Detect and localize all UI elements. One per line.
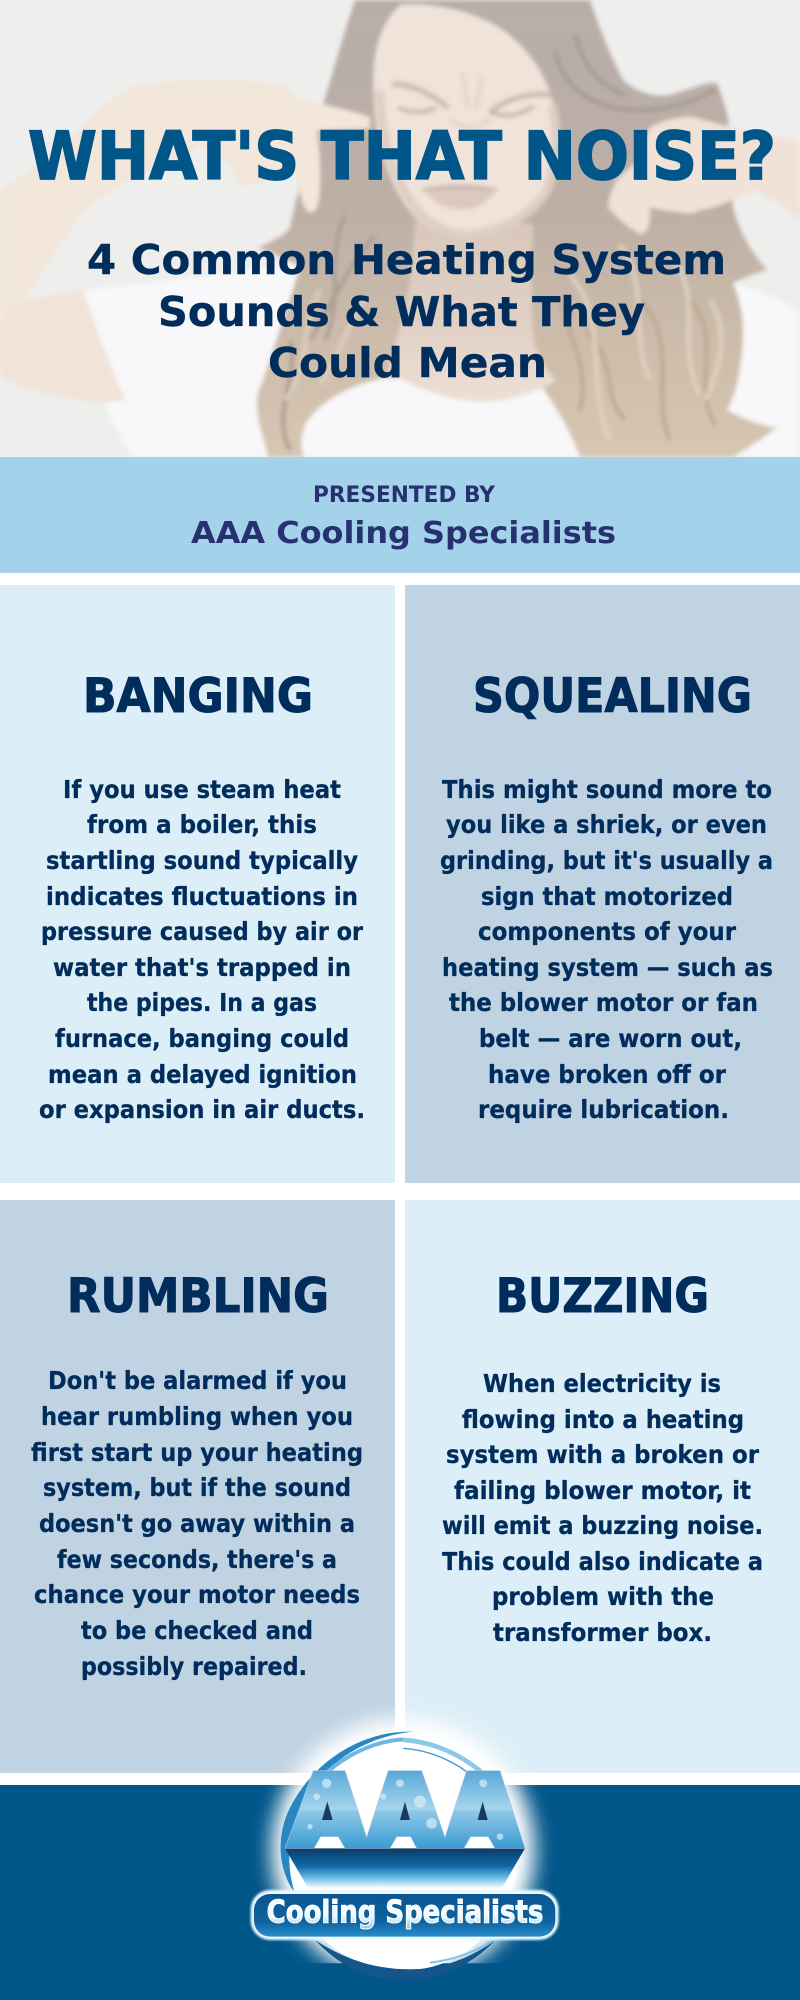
logo AAA letters [285,1771,525,1848]
footer band [0,1785,800,2000]
text block: rumbling: few seconds, there's a [57,1545,337,1574]
text block: rumbling: doesn't go away within a [39,1509,355,1538]
logo badge text: Cooling Specialists [267,1895,543,1931]
text block: squealing: sign that motorized [481,882,733,911]
panel: buzzing [405,1200,800,1773]
title: WHAT'S THAT NOISE? [28,118,776,195]
panel: banging [0,585,395,1183]
subtitle: 4 Common Heating System [87,236,726,284]
text block: buzzing: will emit a buzzing noise. [442,1511,763,1540]
logo AAA extrusion [285,1848,525,1888]
logo counters [322,1802,488,1820]
logo frost speckles [307,1779,503,1840]
text block: banging: indicates fluctuations in [46,882,358,911]
hair mass [257,0,777,457]
right hand [608,117,800,234]
text block: rumbling: first start up your heating [31,1438,363,1467]
logo circle [281,1732,518,1980]
heading: buzzing: BUZZING [496,1269,709,1324]
text block: rumbling: system, but if the sound [43,1473,351,1502]
subtitle [87,236,726,387]
presented by label: PRESENTED BY [313,483,496,508]
panel: presented by band [0,457,800,573]
text block: squealing: the blower motor or fan [449,988,758,1017]
text block: buzzing: When electricity is [483,1369,721,1398]
text block: rumbling: to be checked and [81,1616,313,1645]
text block: squealing: components of your [478,917,737,946]
text block: squealing: This might sound more to [442,775,772,804]
neck and chest [388,205,556,402]
text block: rumbling [31,1366,363,1681]
face [373,4,558,236]
hair strands [283,35,721,450]
company name: AAA Cooling Specialists [191,516,616,551]
text block: banging: If you use steam heat [63,775,341,804]
text block: squealing: heating system — such as [442,953,773,982]
subtitle: Sounds & What They [158,288,645,336]
text block: rumbling: hear rumbling when you [41,1402,353,1431]
text block: squealing: you like a shriek, or even [446,810,767,839]
text block: squealing: have broken off or [488,1060,727,1089]
text block: banging: from a boiler, this [87,810,317,839]
text block: banging: or expansion in air ducts. [39,1095,365,1124]
text block: buzzing: flowing into a heating [462,1405,744,1434]
text block: squealing [440,775,773,1124]
text block: banging: the pipes. In a gas [87,988,317,1017]
face features [392,72,553,209]
left arm [0,80,370,320]
text block: banging: startling sound typically [46,846,358,875]
panel: rumbling [0,1200,395,1773]
text block: squealing: belt — are worn out, [479,1024,742,1053]
text block: buzzing: This could also indicate a [442,1547,763,1576]
text block: banging: pressure caused by air or [41,917,364,946]
panel: squealing [405,585,800,1183]
text block: banging: water that's trapped in [53,953,351,982]
text block: squealing: grinding, but it's usually a [440,846,773,875]
text block: buzzing: system with a broken or [446,1440,760,1469]
text block: rumbling: chance your motor needs [34,1580,360,1609]
hero photo: woman covering her ears [0,0,800,457]
text block: rumbling: possibly repaired. [81,1652,307,1681]
text block: buzzing: transformer box. [493,1618,712,1647]
text block: rumbling: Don't be alarmed if you [48,1366,347,1395]
face edge shading [380,90,555,235]
shirt [83,262,800,457]
logo: AAA Cooling Specialists [251,1718,559,1982]
logo badge [251,1890,559,1940]
heading: squealing: SQUEALING [473,669,752,724]
text block: buzzing [442,1369,763,1647]
logo glow [272,1718,535,1982]
text block: buzzing: problem with the [492,1582,714,1611]
heading: banging: BANGING [83,669,313,724]
heading: rumbling: RUMBLING [67,1269,329,1324]
text block: squealing: require lubrication. [478,1095,729,1124]
text block: buzzing: failing blower motor, it [454,1476,751,1505]
text block: banging [39,775,365,1124]
text block: banging: mean a delayed ignition [48,1060,357,1089]
subtitle: Could Mean [268,339,547,387]
text block: banging: furnace, banging could [55,1024,349,1053]
